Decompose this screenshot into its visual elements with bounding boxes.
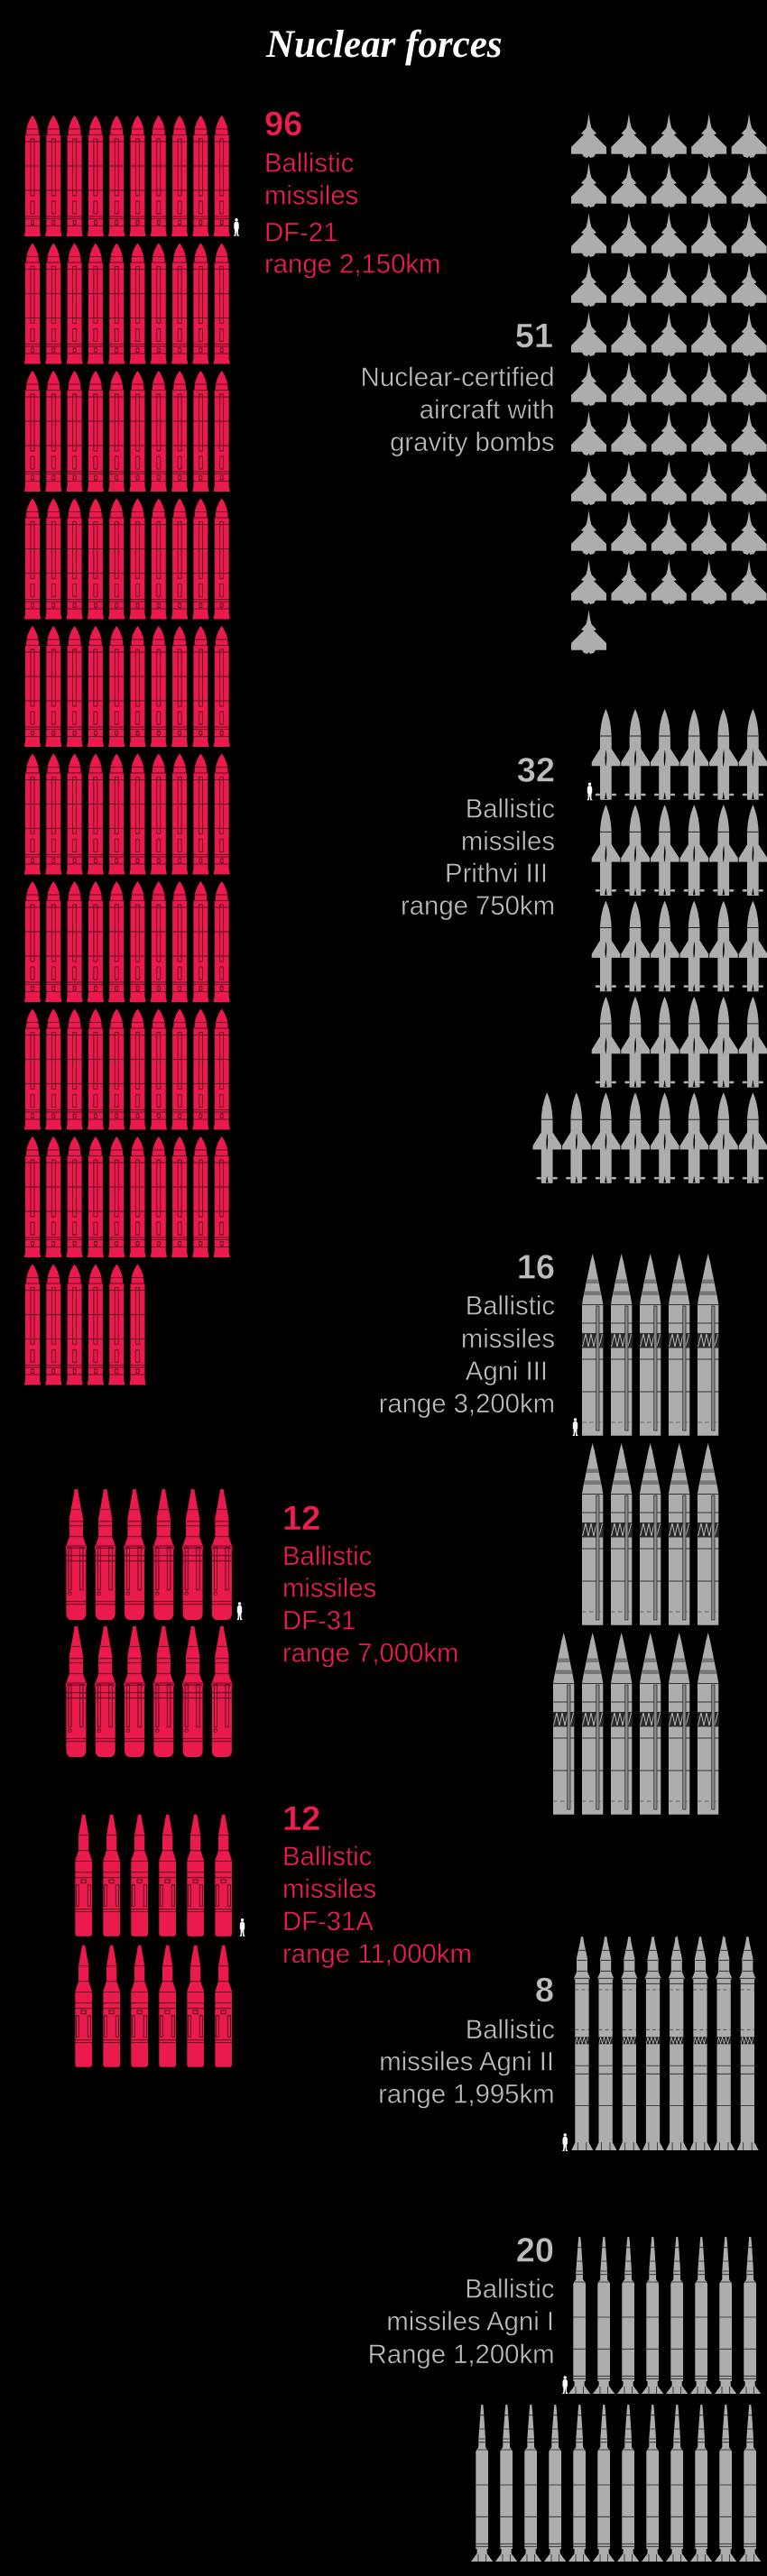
- description: DF-31A: range 11,000km: [282, 1939, 472, 1969]
- description: Agni I: Ballistic: [465, 2275, 554, 2305]
- description: DF-31A: Ballistic: [282, 1842, 372, 1872]
- description: DF-31A: DF-31A: [282, 1907, 374, 1937]
- count: 8: 8: [535, 1972, 554, 2010]
- count: 16: 16: [517, 1249, 555, 1287]
- panel: Agni II ballistic missiles: [378, 1937, 759, 2151]
- icon: human scale figure: [236, 1602, 243, 1620]
- panel: Agni I ballistic missiles: [368, 2232, 761, 2562]
- description: DF-31: Ballistic: [282, 1541, 372, 1571]
- count: 12: 12: [282, 1500, 320, 1538]
- description: Agni II: range 1,995km: [378, 2080, 554, 2110]
- description: Agni II: missiles Agni II: [379, 2047, 554, 2077]
- description: DF-31: DF-31: [282, 1606, 356, 1636]
- chart: 12 DF-31 missile icons: [66, 1489, 233, 1757]
- panel: DF-31 ballistic missiles: [66, 1489, 458, 1757]
- description: aircraft: Nuclear-certified: [361, 363, 554, 392]
- description: DF-21: range 2,150km: [264, 250, 440, 280]
- description: DF-21: DF-21: [264, 218, 337, 248]
- icon: human scale figure: [587, 783, 593, 800]
- description: DF-31A: missiles: [282, 1874, 376, 1904]
- description: aircraft: gravity bombs: [390, 428, 554, 457]
- icon: human scale figure: [562, 2376, 568, 2394]
- chart: 16 Agni III missile icons: [553, 1254, 718, 1815]
- icon: human scale figure: [562, 2133, 568, 2151]
- count: 20: 20: [516, 2232, 554, 2270]
- panel: nuclear-certified aircraft: [361, 114, 767, 654]
- panel: Agni III ballistic missiles: [379, 1249, 718, 1815]
- description: Prithvi III: Prithvi III: [445, 859, 548, 888]
- description: Agni III: Agni III: [466, 1357, 548, 1386]
- count: 96: 96: [264, 106, 302, 143]
- description: Agni II: Ballistic: [466, 2015, 555, 2045]
- description: Agni III: missiles: [461, 1324, 555, 1354]
- panel: DF-31A ballistic missiles: [75, 1800, 472, 2067]
- count: 32: 32: [517, 752, 555, 790]
- description: Prithvi III: Ballistic: [466, 795, 555, 824]
- chart: 51 aircraft icons: [571, 114, 767, 654]
- icon: human scale figure: [234, 218, 239, 236]
- count: 51: 51: [515, 317, 553, 355]
- panel: Prithvi III ballistic missiles: [401, 709, 767, 1183]
- chart: 32 Prithvi III missile icons: [532, 709, 767, 1183]
- description: aircraft: aircraft with: [420, 395, 554, 425]
- description: Agni III: range 3,200km: [379, 1389, 555, 1419]
- panel: DF-21 ballistic missiles: [24, 106, 440, 1385]
- chart: 12 DF-31A missile icons: [75, 1815, 232, 2067]
- description: DF-31: range 7,000km: [282, 1639, 458, 1669]
- description: Prithvi III: missiles: [461, 827, 555, 857]
- chart: 20 Agni I missile icons: [471, 2237, 761, 2562]
- description: Agni III: Ballistic: [466, 1292, 555, 1321]
- description: Prithvi III: range 750km: [401, 891, 555, 921]
- description: Agni I: missiles Agni I: [386, 2306, 554, 2336]
- description: Agni I: Range 1,200km: [368, 2340, 554, 2369]
- icon: human scale figure: [572, 1418, 578, 1436]
- title: Nuclear forces: [265, 23, 503, 66]
- description: DF-21: missiles: [264, 181, 358, 211]
- description: DF-31: missiles: [282, 1574, 376, 1604]
- chart: 96 DF-21 missile icons: [24, 115, 230, 1385]
- chart: 8 Agni II missile icons: [571, 1937, 759, 2150]
- count: 12: 12: [282, 1800, 320, 1838]
- description: DF-21: Ballistic: [264, 149, 354, 179]
- icon: human scale figure: [239, 1918, 245, 1937]
